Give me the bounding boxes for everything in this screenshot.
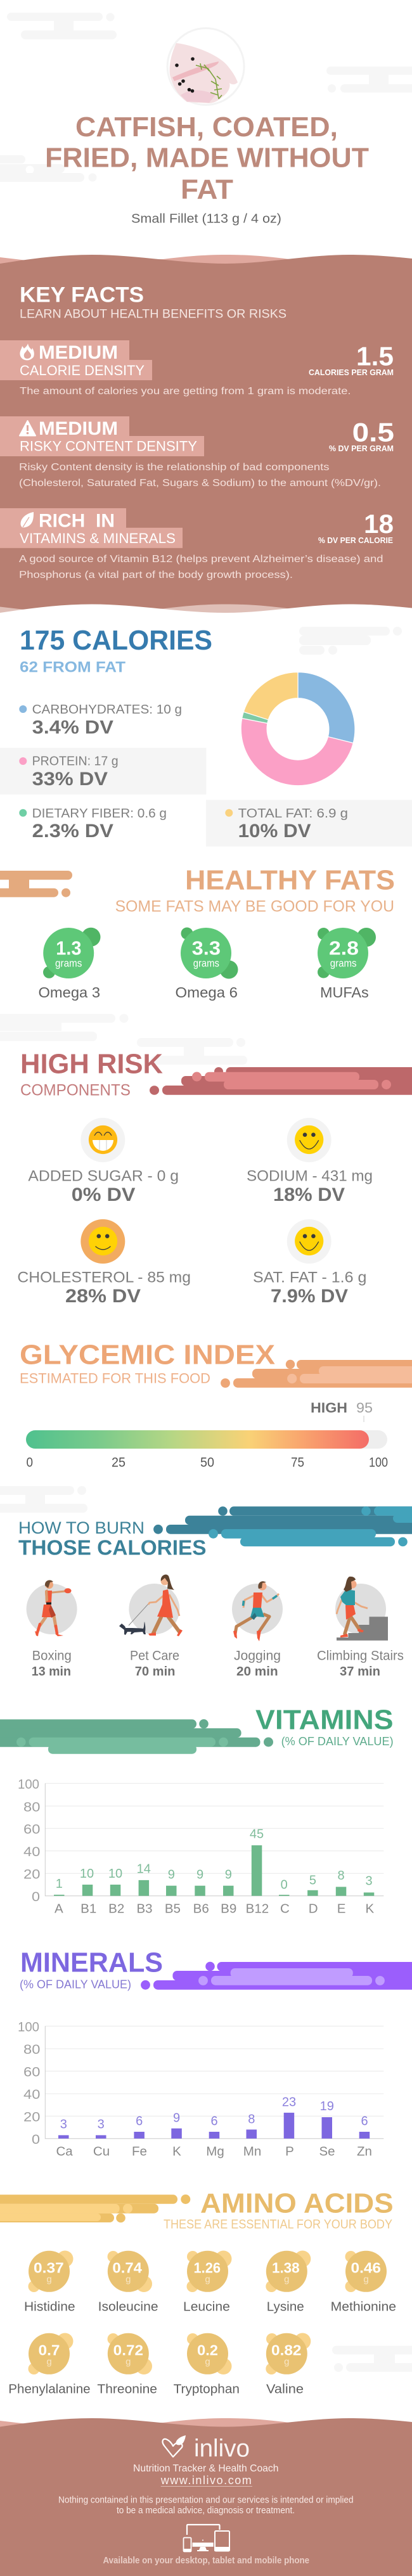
- text: rich in description: A good source of Vitamin B12 (helps prevent Alzheimer’s disease) and: [19, 554, 383, 565]
- icon: leaf: [20, 512, 34, 527]
- icon: smiling face: [89, 1227, 117, 1255]
- legend: total fat: TOTAL FAT: 6.9 g: [238, 806, 348, 821]
- stat: omega 3: 1.3: [56, 937, 81, 959]
- text: availability: Available on your desktop, tablet and mobile phone: [103, 2555, 309, 2566]
- figure: jogger: [233, 1581, 279, 1641]
- stat: % DV per calorie: 18: [364, 509, 394, 539]
- stat: omega 3: [38, 928, 100, 1001]
- risk item: cholesterol: 28% DV: [65, 1286, 141, 1307]
- activity: climbing stairs: 37 min: [340, 1664, 380, 1679]
- stat: MUFAs: MUFAs: [320, 984, 369, 1001]
- risk item: sodium: [247, 1118, 373, 1205]
- bar chart: vitamins: 9: [168, 1868, 175, 1881]
- bar chart: vitamins: 14: [137, 1862, 151, 1876]
- amino acid: lysine: [266, 2251, 311, 2314]
- amino acid: methionine: [331, 2251, 396, 2314]
- risk item: cholesterol: CHOLESTEROL - 85 mg: [17, 1269, 191, 1286]
- risk item: added sugar: ADDED SUGAR - 0 g: [28, 1167, 179, 1184]
- text: rich in description: Phosphorus (a vital part of the body growth process).: [19, 570, 293, 580]
- stat: MUFAs: [318, 928, 376, 1001]
- amino acid: tryptophan: Tryptophan: [174, 2383, 240, 2397]
- bar chart: vitamins: 40: [23, 1845, 40, 1859]
- badge: calorie density: CALORIE DENSITY: [20, 362, 145, 378]
- bar chart: vitamins: B6: [193, 1901, 209, 1916]
- risk item: sodium: 18% DV: [273, 1184, 345, 1205]
- logo: inlivo: [162, 2435, 250, 2463]
- glycemic gauge: 25: [112, 1456, 126, 1470]
- bar chart: vitamins: 80: [23, 1800, 40, 1814]
- stat: omega 3: grams: [55, 958, 82, 970]
- bar chart: minerals: 20: [23, 2110, 40, 2124]
- amino acid: phenylalanine: Phenylalanine: [8, 2383, 91, 2397]
- logo: inlivo: inlivo: [194, 2435, 250, 2463]
- panel: footer: [0, 2418, 412, 2576]
- heading: those calories: THOSE CALORIES: [18, 1535, 207, 1559]
- title: CATFISH, COATED,: [75, 112, 338, 143]
- subtitle: serving size: Small Fillet (113 g / 4 oz): [131, 212, 281, 226]
- glycemic gauge: 0: [27, 1456, 33, 1470]
- amino acid: valine: [266, 2333, 311, 2397]
- bar chart: minerals: Zn: [357, 2144, 372, 2159]
- bar chart: vitamins: B5: [165, 1901, 181, 1916]
- text: risky content description: [19, 462, 381, 489]
- bar chart: vitamins: 45: [250, 1828, 264, 1842]
- risk item: added sugar: 0% DV: [72, 1184, 136, 1205]
- icon: devices: [183, 2525, 229, 2552]
- risk item: saturated fat: SAT. FAT - 1.6 g: [253, 1269, 366, 1286]
- icon: smiling face: [295, 1227, 323, 1255]
- amino acid: threonine: g: [126, 2357, 131, 2368]
- bar chart: minerals: P: [285, 2144, 294, 2159]
- icon: warning triangle: [20, 421, 35, 436]
- label: high 95: HIGH: [311, 1400, 347, 1416]
- text: risky content description: (Cholesterol, Saturated Fat, Sugars & Sodium) to the amount (%DV/gr).: [19, 478, 381, 489]
- bar chart: vitamins: B12: [246, 1901, 269, 1916]
- disclaimer: Nothing contained in this presentation and our services is intended or implied: [58, 2495, 354, 2505]
- bar chart: vitamins: K: [365, 1901, 374, 1916]
- stat: % DV per gram: 0.5: [352, 417, 394, 447]
- amino acid: phenylalanine: 0.7: [38, 2342, 60, 2359]
- label: high 95: [311, 1400, 373, 1422]
- activity: boxing: 13 min: [32, 1664, 71, 1679]
- legend: total fat: 10% DV: [238, 821, 311, 842]
- figure: woman walking dog: [119, 1575, 183, 1636]
- glycemic gauge: 75: [291, 1456, 304, 1470]
- bar chart: minerals: Mg: [206, 2144, 224, 2159]
- glycemic gauge: 50: [200, 1456, 214, 1470]
- bar chart: minerals: 40: [23, 2087, 40, 2102]
- stat: calories per gram: 1.5: [356, 341, 394, 371]
- activity: climbing stairs: [317, 1577, 404, 1679]
- risk item: saturated fat: 7.9% DV: [271, 1286, 348, 1307]
- bar chart: vitamins: 1: [56, 1877, 63, 1891]
- glycemic gauge: 100: [369, 1456, 388, 1470]
- stat: MUFAs: 2.8: [329, 937, 359, 959]
- heading: calories: 175 CALORIES: [20, 625, 212, 656]
- figure: woman climbing stairs: [337, 1577, 388, 1641]
- amino acid: methionine: g: [363, 2274, 369, 2285]
- heading: vitamins: VITAMINS: [255, 1705, 394, 1735]
- bar chart: minerals: 19: [320, 2099, 334, 2113]
- amino acid: tryptophan: 0.2: [197, 2342, 218, 2359]
- bar chart: vitamins: A: [55, 1901, 63, 1916]
- amino acid: isoleucine: g: [126, 2274, 131, 2285]
- amino acid: threonine: 0.72: [113, 2342, 143, 2359]
- bar chart: minerals: Cu: [93, 2144, 110, 2159]
- stat: % DV per gram: % DV PER GRAM: [329, 444, 394, 453]
- bar chart: vitamins: 10: [108, 1867, 122, 1881]
- food photo: catfish fillet: [167, 28, 244, 105]
- amino acid: methionine: 0.46: [351, 2260, 381, 2276]
- bar chart: minerals: 80: [23, 2042, 40, 2057]
- amino acid: histidine: g: [46, 2274, 52, 2285]
- bar chart: vitamins: 60: [23, 1823, 40, 1837]
- bar chart: vitamins: E: [337, 1901, 345, 1916]
- bar chart: vitamins: 8: [337, 1869, 345, 1883]
- amino acid: histidine: [24, 2251, 75, 2314]
- subheading: glycemic index: ESTIMATED FOR THIS FOOD: [20, 1371, 210, 1387]
- stat: omega 3: Omega 3: [38, 984, 100, 1001]
- activity: jogging: Jogging: [234, 1648, 281, 1663]
- subheading: LEARN ABOUT HEALTH BENEFITS OR RISKS: [20, 307, 286, 321]
- risk item: saturated fat: [253, 1219, 366, 1307]
- website link: www.inlivo.com: [160, 2474, 252, 2487]
- activity: boxing: Boxing: [32, 1648, 72, 1663]
- subheading: healthy fats: SOME FATS MAY BE GOOD FOR YOU: [115, 897, 394, 915]
- amino acid: isoleucine: Isoleucine: [98, 2300, 158, 2314]
- stat: omega 6: 3.3: [192, 937, 221, 959]
- bar chart: vitamins: B3: [136, 1901, 153, 1916]
- badge: calorie density: MEDIUM: [39, 342, 118, 363]
- bar chart: vitamins: 0: [32, 1890, 40, 1904]
- legend: protein: PROTEIN: 17 g: [32, 754, 119, 769]
- badge: risky content density: RISKY CONTENT DENSITY: [20, 439, 197, 454]
- stat: calories per gram: CALORIES PER GRAM: [309, 368, 394, 377]
- bar chart: minerals: 23: [282, 2095, 296, 2109]
- heading: amino acids: AMINO ACIDS: [200, 2189, 394, 2219]
- bar chart: minerals: Fe: [132, 2144, 147, 2159]
- bar chart: vitamins: 100: [18, 1778, 39, 1792]
- stat: % DV per calorie: [318, 509, 394, 545]
- subheading: minerals: (% OF DAILY VALUE): [20, 1978, 131, 1990]
- amino acid: histidine: 0.37: [34, 2260, 64, 2276]
- risk item: sodium: SODIUM - 431 mg: [247, 1167, 373, 1184]
- bar chart: minerals: [18, 2020, 383, 2159]
- tagline: Nutrition Tracker & Health Coach: [133, 2463, 279, 2474]
- legend: protein: 33% DV: [32, 769, 108, 790]
- bar chart: minerals: 6: [210, 2115, 218, 2129]
- text: rich in description: [19, 554, 383, 580]
- bar chart: minerals: 3: [98, 2117, 105, 2131]
- bar chart: vitamins: B9: [221, 1901, 236, 1916]
- bar chart: vitamins: 3: [365, 1874, 373, 1888]
- badge: risky content density: MEDIUM: [39, 418, 118, 439]
- heading: minerals: MINERALS: [20, 1948, 163, 1978]
- activity: jogging: 20 min: [236, 1664, 278, 1679]
- title: [45, 112, 369, 205]
- bar chart: minerals: 60: [23, 2065, 40, 2079]
- icon: grinning face: [89, 1125, 117, 1154]
- amino acid: valine: Valine: [266, 2383, 304, 2397]
- amino acid: methionine: Methionine: [331, 2300, 396, 2314]
- stat: calories per gram: [309, 341, 394, 377]
- amino acid: lysine: Lysine: [267, 2300, 304, 2314]
- amino acid: valine: g: [284, 2357, 289, 2368]
- bar chart: minerals: 8: [248, 2113, 255, 2127]
- heading: high risk: HIGH RISK: [20, 1049, 164, 1079]
- donut chart: macronutrients: [241, 672, 355, 786]
- subheading: amino acids: THESE ARE ESSENTIAL FOR YOUR BODY: [164, 2218, 392, 2232]
- amino acid: leucine: Leucine: [183, 2300, 230, 2314]
- icon: flame: [20, 343, 34, 360]
- amino acid: lysine: 1.38: [272, 2260, 300, 2276]
- legend: carbohydrates: [19, 702, 182, 738]
- amino acid: isoleucine: [98, 2251, 158, 2314]
- amino acid: valine: 0.82: [271, 2342, 302, 2359]
- amino acid: histidine: Histidine: [24, 2300, 75, 2314]
- legend: carbohydrates: CARBOHYDRATES: 10 g: [32, 702, 182, 717]
- bar chart: vitamins: D: [309, 1901, 318, 1916]
- subheading: from fat: 62 FROM FAT: [20, 659, 126, 676]
- bar chart: minerals: Ca: [56, 2144, 73, 2159]
- badge: rich in vitamins and minerals: RICH IN: [39, 510, 115, 531]
- badge: risky content density: [0, 416, 204, 456]
- title: FAT: [181, 174, 233, 205]
- disclaimer: [58, 2495, 354, 2516]
- panel: key facts: [0, 255, 412, 627]
- legend: dietary fiber: DIETARY FIBER: 0.6 g: [32, 806, 167, 821]
- badge: rich in vitamins and minerals: [0, 508, 183, 548]
- bar chart: minerals: 0: [32, 2132, 40, 2147]
- legend: total fat: [206, 800, 412, 847]
- stat: omega 6: grams: [193, 958, 219, 970]
- stat: MUFAs: grams: [330, 958, 357, 970]
- bar chart: vitamins: B1: [80, 1901, 96, 1916]
- amino acid: tryptophan: [174, 2333, 240, 2397]
- text: calorie density description: The amount of calories you are getting from 1 gram is moderate.: [20, 386, 351, 397]
- bar chart: minerals: 3: [60, 2117, 67, 2131]
- bar chart: vitamins: [18, 1778, 383, 1916]
- heading: key facts: KEY FACTS: [20, 283, 144, 307]
- activity: boxing: [27, 1580, 77, 1679]
- amino acid: threonine: [97, 2333, 157, 2397]
- bar chart: vitamins: 20: [23, 1868, 40, 1882]
- amino acid: phenylalanine: [8, 2333, 91, 2397]
- amino acid: isoleucine: 0.74: [112, 2260, 142, 2276]
- subheading: vitamins: (% OF DAILY VALUE): [281, 1735, 394, 1748]
- figure: boxer: [35, 1580, 71, 1636]
- amino acid: threonine: Threonine: [97, 2383, 157, 2397]
- amino acid: leucine: 1.26: [194, 2260, 221, 2276]
- bar chart: vitamins: B2: [108, 1901, 124, 1916]
- risk item: cholesterol: [17, 1219, 191, 1307]
- bar chart: minerals: 6: [361, 2115, 368, 2129]
- heading: how to burn: HOW TO BURN: [18, 1518, 145, 1537]
- activity: pet care: Pet Care: [130, 1648, 179, 1663]
- amino acid: lysine: g: [284, 2274, 289, 2285]
- risk item: added sugar: [28, 1118, 179, 1205]
- legend: dietary fiber: [19, 806, 167, 842]
- bar chart: vitamins: 0: [281, 1878, 288, 1892]
- bar chart: minerals: 100: [18, 2020, 39, 2035]
- bar chart: vitamins: 5: [309, 1873, 316, 1887]
- amino acid: tryptophan: g: [205, 2357, 210, 2368]
- activity: pet care: 70 min: [135, 1664, 175, 1679]
- glycemic gauge: [26, 1400, 388, 1470]
- amino acid: leucine: [183, 2251, 232, 2314]
- text: risky content description: Risky Content density is the relationship of bad components: [19, 462, 330, 473]
- heading: glycemic index: GLYCEMIC INDEX: [20, 1340, 275, 1371]
- activity: jogging: [232, 1581, 283, 1679]
- bar chart: vitamins: 9: [196, 1868, 203, 1881]
- subheading: components: COMPONENTS: [20, 1081, 131, 1099]
- bar chart: minerals: 6: [136, 2115, 143, 2129]
- disclaimer: to be a medical advice, diagnosis or treatment.: [117, 2506, 295, 2516]
- legend: carbohydrates: 3.4% DV: [32, 717, 113, 738]
- activity: pet care: [119, 1575, 183, 1679]
- stat: % DV per gram: [329, 417, 394, 453]
- stat: omega 6: Omega 6: [175, 984, 238, 1001]
- bar chart: vitamins: C: [280, 1901, 290, 1916]
- activity: climbing stairs: Climbing Stairs: [317, 1648, 404, 1663]
- bar chart: minerals: Mn: [243, 2144, 261, 2159]
- stat: % DV per calorie: % DV PER CALORIE: [318, 536, 393, 545]
- icon: smiling face: [295, 1125, 323, 1154]
- bar chart: vitamins: 9: [225, 1868, 232, 1881]
- badge: calorie density: [0, 340, 152, 380]
- amino acid: leucine: g: [205, 2274, 210, 2285]
- title: FRIED, MADE WITHOUT: [45, 143, 369, 173]
- legend: protein: [0, 748, 207, 795]
- bar chart: minerals: K: [172, 2144, 181, 2159]
- bar chart: vitamins: 10: [80, 1867, 94, 1881]
- bar chart: minerals: Se: [319, 2144, 335, 2159]
- bar chart: minerals: 9: [173, 2111, 180, 2125]
- label: high 95: 95: [356, 1400, 373, 1416]
- badge: rich in vitamins and minerals: VITAMINS & MINERALS: [20, 530, 176, 546]
- heading: healthy fats: HEALTHY FATS: [185, 865, 395, 895]
- amino acid: phenylalanine: g: [46, 2357, 52, 2368]
- legend: dietary fiber: 2.3% DV: [32, 821, 113, 842]
- stat: omega 6: [175, 928, 238, 1001]
